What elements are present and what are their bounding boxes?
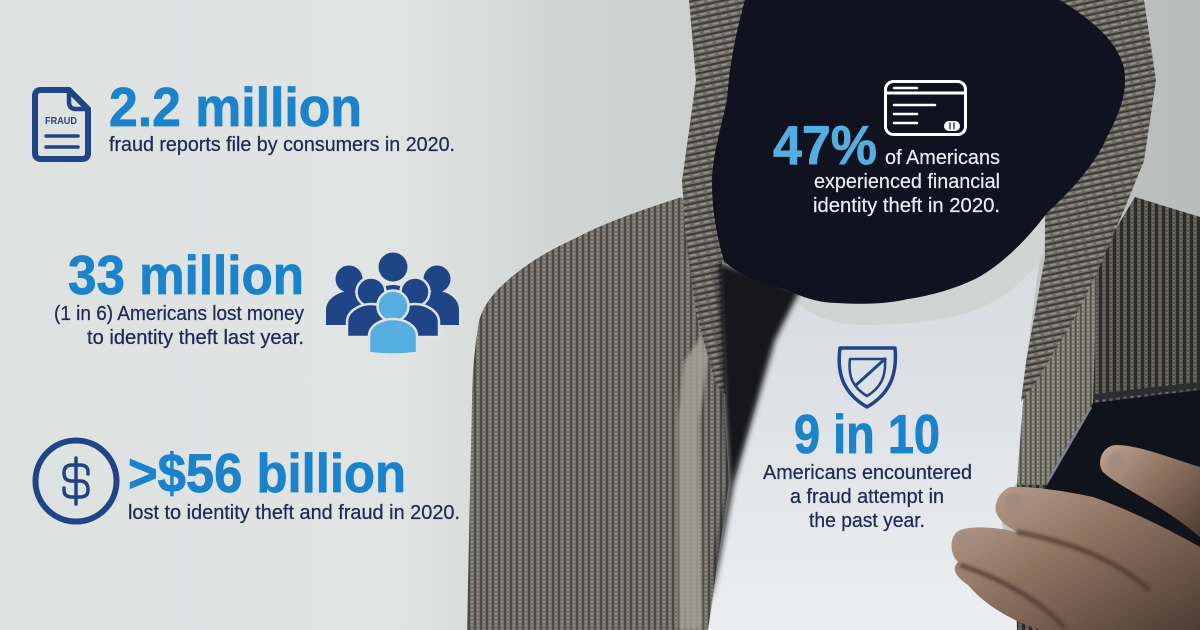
value: 9 in 10: 9 in 10 bbox=[794, 403, 940, 465]
stat: 9 in 10 bbox=[763, 348, 972, 532]
icon: fraud document bbox=[35, 90, 88, 159]
hand: palm and lower fingers bbox=[952, 487, 1200, 630]
icon: fraud document: FRAUD bbox=[45, 116, 77, 127]
dark hood opening bbox=[712, 0, 1125, 304]
stat: 33 million bbox=[54, 244, 459, 354]
t-shirt bbox=[708, 220, 1045, 630]
caption: Americans encountered: Americans encountered bbox=[763, 462, 972, 484]
caption: lost to identity theft: lost to identity theft and fraud in 2020. bbox=[128, 502, 460, 524]
value: 47%: 47% bbox=[773, 114, 877, 176]
left sleeve and jacket bbox=[467, 197, 729, 630]
hand: finger creases bbox=[960, 532, 1150, 628]
icon: dollar coin bbox=[36, 440, 116, 522]
jacket zipper panel bbox=[1017, 273, 1097, 485]
stat: 2.2 million bbox=[35, 76, 455, 159]
value: more than 56 billion: >$56 billion bbox=[128, 442, 406, 504]
caption: Americans lost money: (1 in 6) Americans lost money bbox=[54, 303, 304, 325]
drawstring bbox=[678, 333, 708, 630]
hand: finger nails bbox=[956, 452, 1127, 549]
value: 2.2 million: 2.2 million bbox=[109, 76, 362, 138]
phone edge highlight bbox=[1047, 407, 1091, 483]
photo: hooded figure bbox=[467, 0, 1200, 630]
hood band bbox=[682, 0, 1156, 402]
icon: credit card bbox=[886, 82, 966, 134]
stat: 47 percent bbox=[773, 82, 1000, 217]
shadow strip beside shirt bbox=[712, 262, 800, 600]
icon: shield bbox=[839, 348, 895, 407]
value: 33 million: 33 million bbox=[68, 244, 304, 306]
phone bbox=[1017, 390, 1200, 560]
icon: group of people bbox=[326, 252, 459, 354]
hand: top finger bbox=[1100, 445, 1200, 537]
caption: a fraud attempt: a fraud attempt in bbox=[790, 486, 944, 508]
caption: of Americans: of Americans bbox=[885, 147, 1000, 169]
stat: 56 billion bbox=[36, 440, 460, 524]
caption: identity theft: identity theft in 2020. bbox=[813, 195, 1000, 217]
caption: experienced financial: experienced financial bbox=[814, 171, 1000, 193]
phone top edge bbox=[1095, 385, 1200, 397]
caption: to identity theft: to identity theft last year. bbox=[87, 327, 304, 349]
caption: the past year: the past year. bbox=[809, 510, 925, 532]
shirt collar bbox=[785, 210, 1047, 325]
caption: fraud reports: fraud reports file by consumers in 2020. bbox=[109, 134, 455, 156]
right sleeve and jacket bbox=[1017, 197, 1200, 630]
